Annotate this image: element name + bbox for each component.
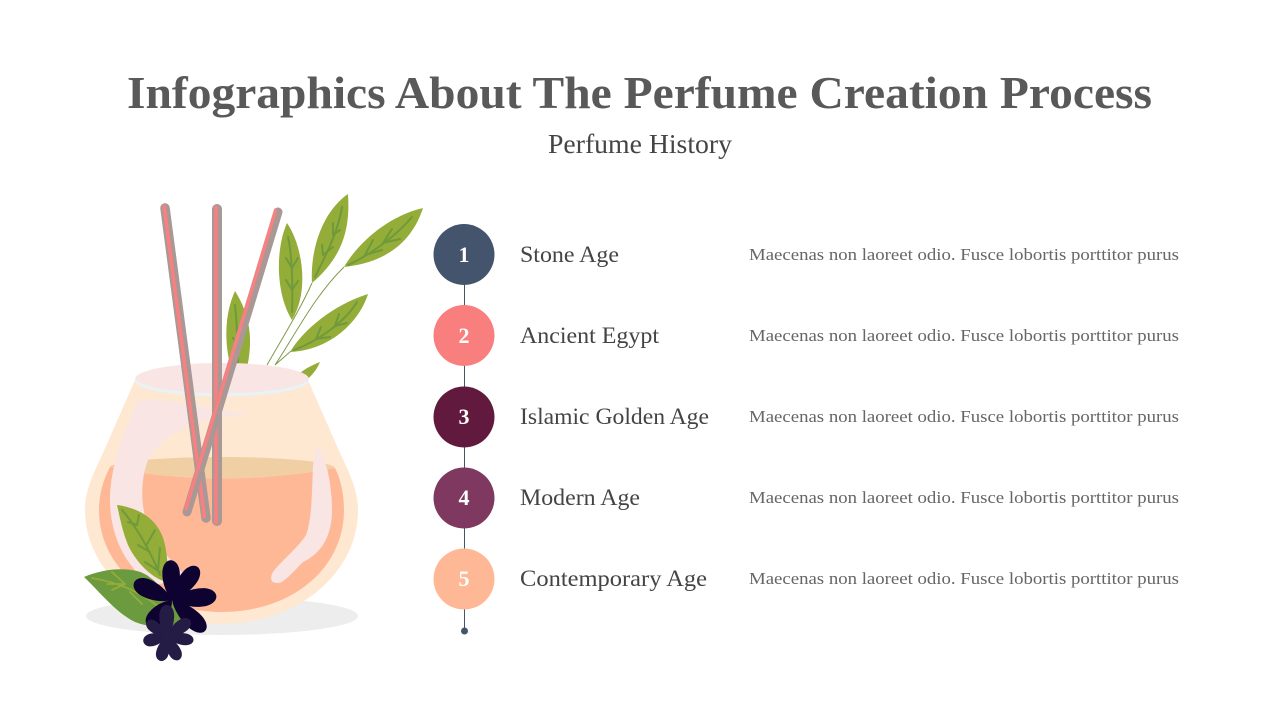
step 2: 2 — [458, 323, 470, 348]
large dark flower — [130, 560, 217, 637]
jar rim — [135, 379, 309, 396]
step 3: Maecenas non laoreet odio. Fusce lobortis porttitor purus — [749, 407, 1179, 426]
reed stick 1 — [164, 205, 206, 518]
front leaf light — [117, 505, 168, 582]
step 2 — [434, 305, 1179, 366]
perfume liquid — [99, 467, 344, 612]
reed stick 3 — [186, 209, 278, 512]
step 1: Stone Age — [520, 242, 619, 267]
step 4: Maecenas non laoreet odio. Fusce lobortis porttitor purus — [749, 488, 1179, 507]
jar mouth — [135, 363, 309, 395]
step 1 — [434, 224, 1179, 285]
step 3: 3 — [458, 404, 470, 429]
step 5 — [434, 548, 1179, 610]
reed stick 2 — [216, 206, 217, 524]
plant sprig behind jar — [226, 194, 423, 384]
right glass reflection — [271, 445, 332, 583]
step 4: 4 — [458, 485, 470, 510]
step 3 — [434, 386, 1179, 448]
subtitle: Perfume History — [548, 129, 733, 159]
step 5: 5 — [458, 566, 470, 591]
liquid surface — [110, 457, 335, 478]
ground shadow — [86, 597, 358, 635]
step 2: Maecenas non laoreet odio. Fusce lobortis porttitor purus — [749, 326, 1179, 345]
step 3: Islamic Golden Age — [520, 404, 709, 429]
front leaf dark — [84, 569, 185, 626]
step 2: Ancient Egypt — [520, 323, 660, 348]
step 1: Maecenas non laoreet odio. Fusce lobortis porttitor purus — [749, 245, 1179, 264]
timeline connector — [461, 254, 468, 634]
title: Infographics About The Perfume Creation Process — [127, 67, 1152, 118]
step 5: Contemporary Age — [520, 566, 707, 591]
illustration: perfume diffuser jar — [84, 194, 423, 663]
left glass reflection — [110, 400, 250, 585]
step 4: Modern Age — [520, 485, 640, 510]
step 4 — [434, 468, 1179, 528]
step 5: Maecenas non laoreet odio. Fusce lobortis porttitor purus — [749, 569, 1179, 588]
small dark flower — [142, 605, 194, 663]
step 1: 1 — [458, 242, 470, 267]
jar body — [85, 380, 358, 624]
